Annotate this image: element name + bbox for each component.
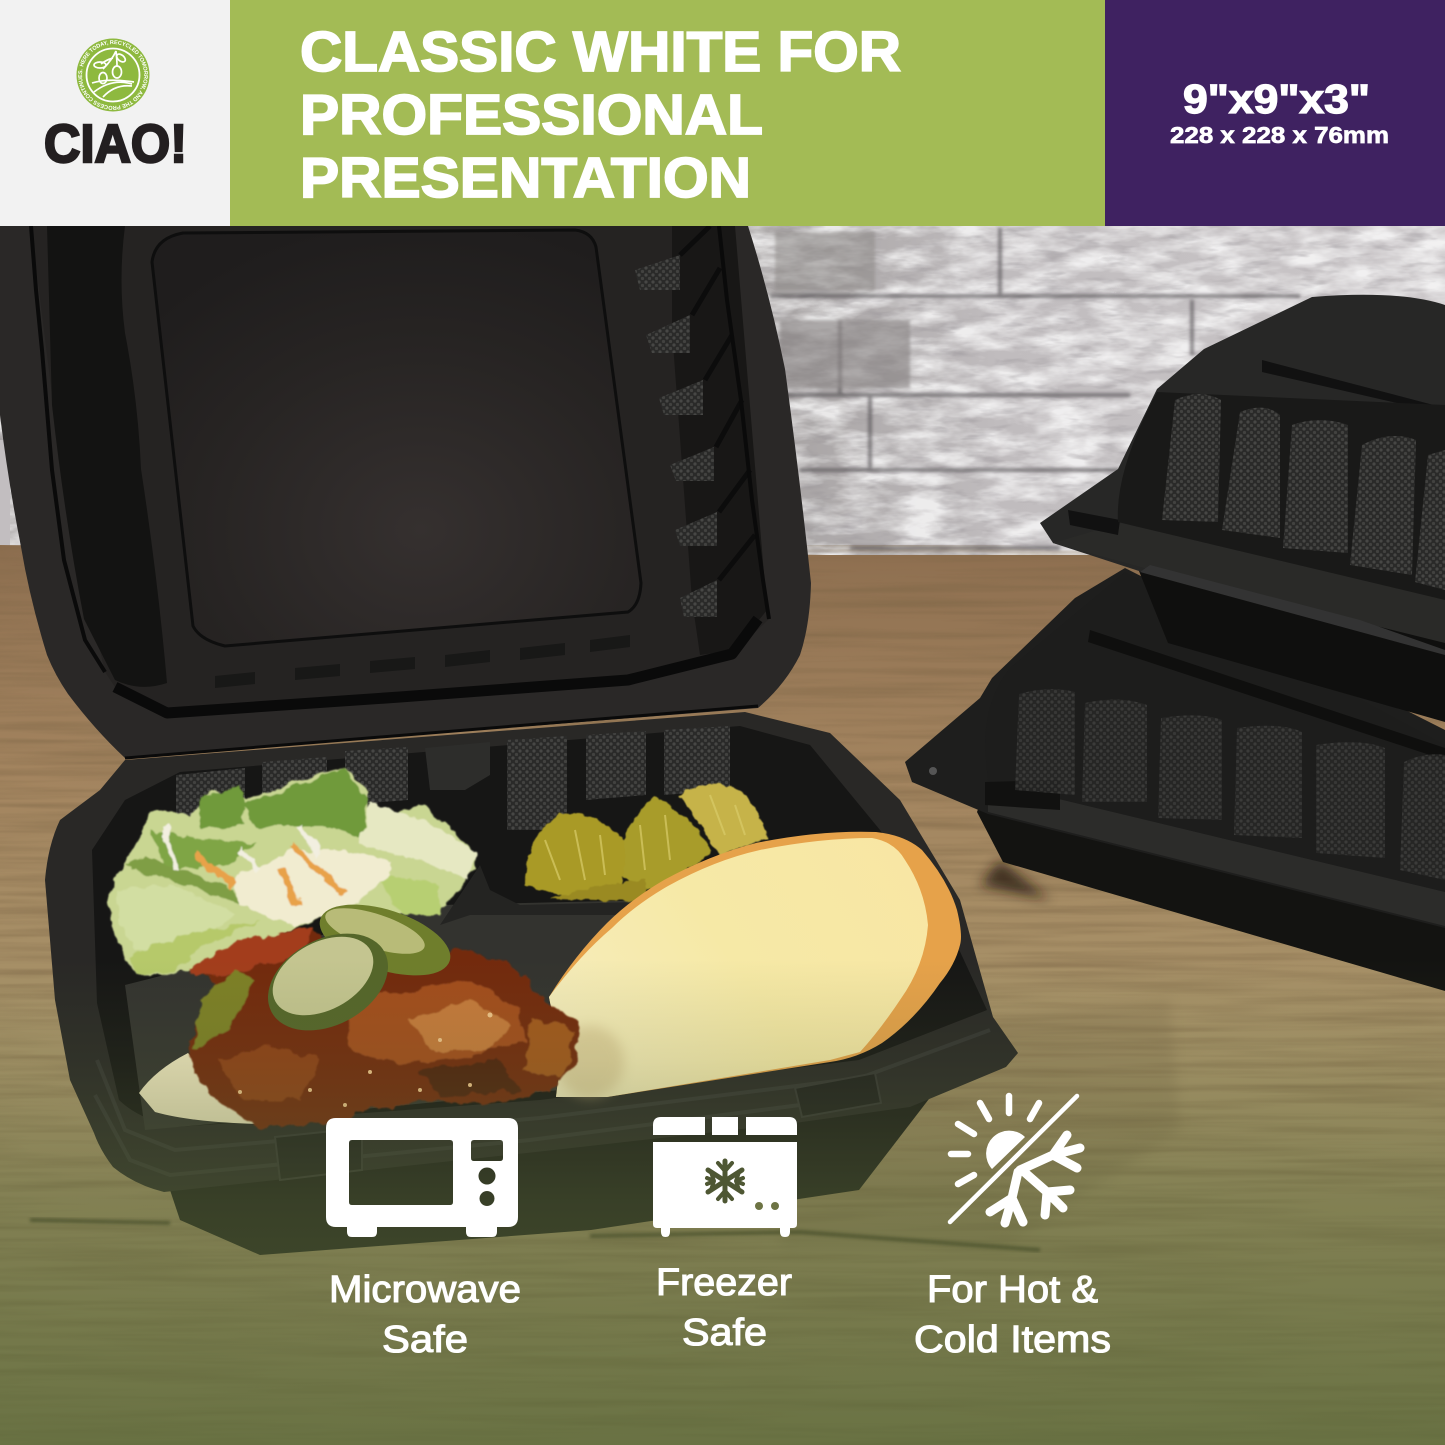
title text bbox=[300, 20, 901, 210]
dimensions inches: 9"x9"x3" bbox=[1183, 76, 1370, 122]
logo wordmark: CIAO! bbox=[44, 114, 187, 174]
logo badge: HERE TODAY, RECYCLED TOMORROW, AND THE PROCESS CONTINUES. bbox=[78, 40, 148, 110]
icon: microwave bbox=[326, 1118, 518, 1237]
title text: PRESENTATION bbox=[300, 146, 751, 210]
rim highlights bbox=[95, 1030, 990, 1175]
food: salad bbox=[110, 768, 475, 975]
stacked container: lower bbox=[905, 568, 1445, 991]
header panel: logo bbox=[0, 0, 230, 226]
tray lower body bbox=[160, 1095, 932, 1255]
food: meat with sauce bbox=[188, 927, 581, 1127]
food: pickle slices on meat bbox=[251, 890, 459, 1050]
label: freezer safe: Freezer bbox=[656, 1262, 792, 1304]
label: microwave safe bbox=[329, 1269, 521, 1361]
food: pickles behind bun bbox=[525, 784, 768, 901]
label: freezer safe bbox=[656, 1262, 792, 1354]
title text: PROFESSIONAL bbox=[300, 83, 763, 147]
food compartments floor bbox=[125, 900, 650, 1130]
label: for hot and cold items bbox=[914, 1269, 1111, 1361]
food: bun base under meat bbox=[139, 1053, 258, 1124]
icon: hot and cold bbox=[950, 1096, 1080, 1223]
textured panels bbox=[1162, 394, 1445, 590]
lid inner panel bbox=[152, 230, 641, 646]
title text: CLASSIC WHITE FOR bbox=[300, 20, 901, 84]
photo background: wooden table bbox=[0, 545, 1445, 1445]
header panel: title bbox=[230, 0, 1105, 226]
header panel: dimensions bbox=[1105, 0, 1445, 226]
lid dark ribbed bands bbox=[47, 226, 167, 687]
photo background: brick wall bbox=[0, 226, 1445, 566]
lid lower rib blocks bbox=[215, 635, 630, 688]
clamshell base tray bbox=[45, 712, 1018, 1255]
lid grooves bbox=[31, 226, 769, 758]
stacked container: upper bbox=[1040, 295, 1445, 722]
hinge tab bbox=[425, 742, 490, 790]
dimensions millimetres: 228 x 228 x 76mm bbox=[1170, 122, 1389, 148]
label: for hot and cold items: Cold Items bbox=[914, 1319, 1111, 1361]
label: freezer safe: Safe bbox=[682, 1312, 767, 1354]
food: bun bbox=[549, 832, 961, 1098]
label: microwave safe: Microwave bbox=[329, 1269, 521, 1311]
clasps bbox=[795, 1073, 881, 1117]
back wall panels bbox=[176, 726, 730, 830]
label: for hot and cold items: For Hot & bbox=[927, 1269, 1098, 1311]
lid textured rib patches bbox=[635, 255, 717, 617]
icon: freezer bbox=[653, 1117, 797, 1237]
open clamshell lid bbox=[0, 226, 811, 758]
label: microwave safe: Safe bbox=[382, 1319, 468, 1361]
textured panels bbox=[1015, 689, 1445, 880]
